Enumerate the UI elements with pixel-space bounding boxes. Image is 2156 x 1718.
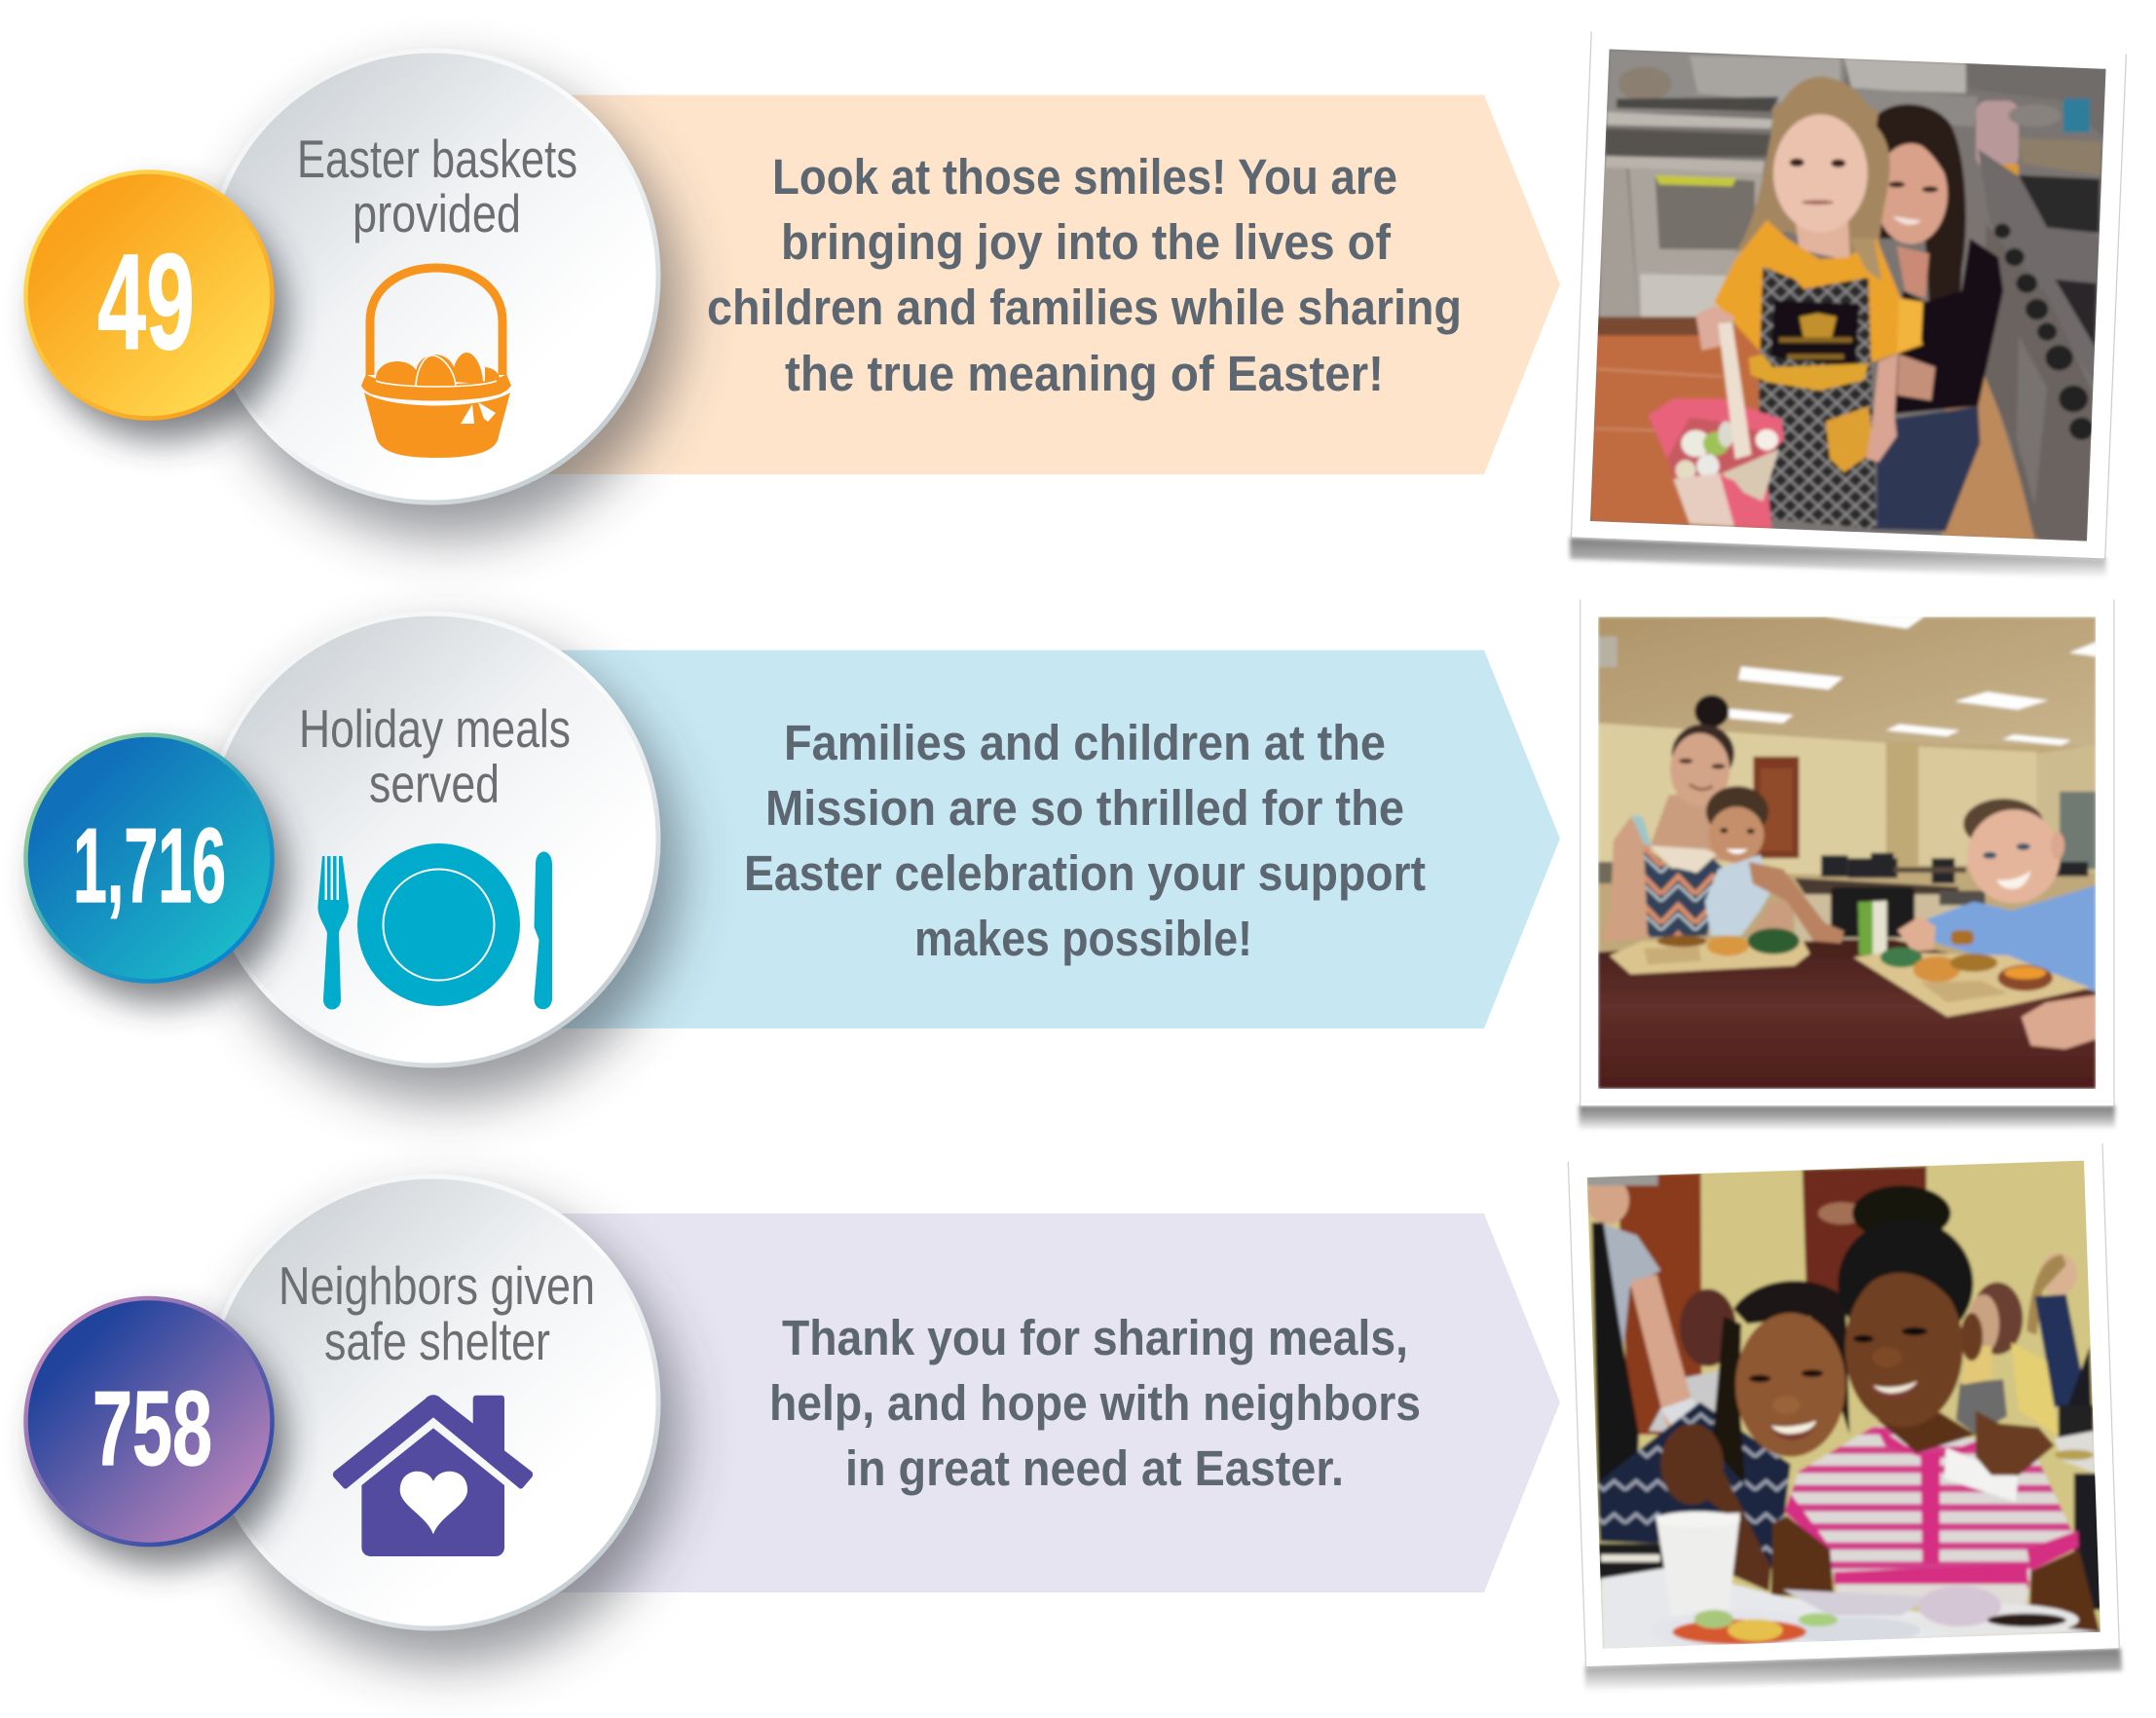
frame shadow — [1580, 1105, 2115, 1131]
woman — [1875, 104, 1966, 313]
stat circle: 758: 758 — [93, 1369, 212, 1488]
label: Holiday meals served: served — [369, 754, 500, 814]
photo 1: girl and woman in kitchen — [1570, 32, 2126, 579]
body text: bringing joy into the lives of — [781, 214, 1392, 270]
body text: the true meaning of Easter! — [785, 346, 1384, 401]
small shadow — [38, 192, 287, 441]
woman — [1694, 695, 1729, 728]
child — [1704, 784, 1770, 826]
body text — [707, 149, 1462, 401]
server at left — [1587, 1184, 1632, 1225]
white disc — [206, 51, 658, 503]
white frame — [1568, 1143, 2119, 1667]
body text: Look at those smiles! You are — [772, 149, 1397, 205]
girl — [1735, 75, 1891, 255]
stat circle: 758 — [25, 1298, 273, 1545]
icon: plate fork knife — [317, 843, 552, 1009]
right girl hair — [1852, 1185, 1951, 1241]
body text: Families and children at the — [784, 715, 1386, 770]
photo 3: two smiling girls — [1568, 1143, 2122, 1692]
body text: help, and hope with neighbors — [769, 1375, 1421, 1431]
icon: basket — [361, 268, 511, 458]
stat circle: 1,716 — [25, 734, 273, 982]
label: Neighbors given safe shelter: safe shelter — [324, 1311, 550, 1371]
label: Neighbors given safe shelter — [279, 1255, 595, 1371]
small shadow — [38, 755, 287, 1004]
background people — [1680, 1288, 1736, 1366]
left tray — [1610, 939, 1809, 974]
table — [1598, 939, 2096, 1089]
label: Easter baskets provided — [297, 129, 577, 243]
disc shadow — [215, 74, 679, 538]
label: Holiday meals served — [299, 698, 571, 814]
name tag — [1944, 1447, 2018, 1502]
stat circle: 49: 49 — [97, 225, 195, 378]
photo 2: family at cafeteria table — [1580, 600, 2115, 1131]
milk carton — [1858, 901, 1887, 955]
label: Easter baskets provided: provided — [353, 183, 521, 243]
pink striped shirt — [1785, 1426, 2079, 1604]
white disc — [206, 1176, 658, 1628]
arrow banner: peach — [487, 95, 1560, 474]
right girl face — [1877, 1412, 1976, 1453]
left girl — [1598, 1402, 1791, 1569]
white disc — [206, 614, 658, 1065]
row: Easter baskets — [25, 51, 1560, 538]
row: Safe shelter — [25, 1176, 1560, 1663]
frame shadow — [1585, 1648, 2122, 1692]
body text: in great need at Easter. — [845, 1440, 1344, 1496]
foam cup — [1655, 1513, 1740, 1619]
arrow banner: lavender — [487, 1214, 1560, 1592]
stat circle: 49 — [25, 171, 273, 419]
frame shadow — [1570, 538, 2106, 579]
body text: Mission are so thrilled for the — [765, 780, 1404, 836]
plates and food — [1783, 1589, 1932, 1616]
white frame — [1580, 600, 2114, 1106]
boy — [1926, 885, 2096, 991]
body text: Thank you for sharing meals, — [782, 1310, 1408, 1365]
stat circle: 1,716: 1,716 — [73, 806, 226, 925]
body text: Easter celebration your support — [744, 845, 1426, 901]
small shadow — [38, 1318, 287, 1567]
disc shadow — [215, 1200, 679, 1663]
label: Neighbors given safe shelter: Neighbors given — [279, 1255, 595, 1316]
arrow banner: blue — [487, 651, 1560, 1028]
label: Holiday meals served: Holiday meals — [299, 698, 571, 759]
table — [1601, 1567, 2101, 1651]
right tray — [1853, 952, 2090, 1017]
icon: house with heart — [333, 1395, 533, 1556]
body text: makes possible! — [914, 911, 1252, 966]
arms and hands — [1976, 1410, 2055, 1475]
white frame — [1571, 32, 2126, 559]
label: Easter baskets provided: Easter baskets — [297, 129, 577, 189]
disc shadow — [215, 637, 679, 1101]
body text — [744, 715, 1426, 966]
Easter basket held — [1649, 398, 1784, 528]
body text — [769, 1310, 1421, 1496]
row: Holiday meals — [25, 614, 1560, 1101]
body text: children and families while sharing — [707, 280, 1462, 335]
